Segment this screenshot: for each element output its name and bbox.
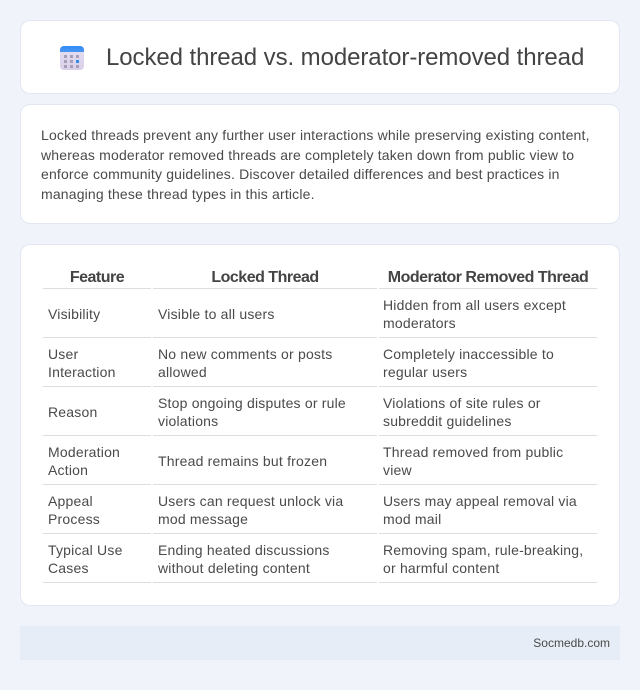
row: reason: Violations of site rules or xyxy=(383,395,541,411)
row: visibility: Visibility xyxy=(48,306,100,322)
table header xyxy=(43,269,597,289)
table header: Feature xyxy=(70,269,124,286)
row: user interaction: No new comments or posts xyxy=(158,346,332,362)
row: user interaction: Interaction xyxy=(48,364,116,380)
row: moderation action: Moderation xyxy=(48,444,120,460)
row: visibility xyxy=(43,297,597,338)
row: user interaction xyxy=(43,346,597,387)
row: appeal process: mod mail xyxy=(383,511,441,527)
row: moderation action: Thread remains but frozen xyxy=(158,453,327,469)
row: reason: Reason xyxy=(48,404,97,420)
row: typical use cases: Ending heated discussions xyxy=(158,542,330,558)
row: user interaction: Completely inaccessible to xyxy=(383,346,554,362)
row: visibility: Visible to all users xyxy=(158,306,275,322)
panel: comparison table xyxy=(20,244,620,606)
panel: intro text xyxy=(20,104,620,224)
row: reason: violations xyxy=(158,413,218,429)
table header: Moderator Removed Thread xyxy=(388,269,588,286)
intro paragraph xyxy=(41,127,590,202)
table header: Locked Thread xyxy=(211,269,319,286)
row: visibility: moderators xyxy=(383,315,456,331)
panel: title card xyxy=(20,20,620,94)
row: typical use cases: without deleting content xyxy=(158,560,310,576)
row: moderation action: Thread removed from public xyxy=(383,444,563,460)
row: user interaction: User xyxy=(48,346,78,362)
row: typical use cases: Cases xyxy=(48,560,89,576)
row: typical use cases: Typical Use xyxy=(48,542,123,558)
row: user interaction: allowed xyxy=(158,364,207,380)
row: appeal process: mod message xyxy=(158,511,248,527)
row: reason: subreddit guidelines xyxy=(383,413,512,429)
intro paragraph: managing these thread types in this article. xyxy=(41,186,315,202)
row: reason: Stop ongoing disputes or rule xyxy=(158,395,346,411)
footer bar xyxy=(20,626,620,660)
row: user interaction: regular users xyxy=(383,364,467,380)
row: reason xyxy=(43,395,597,436)
row: moderation action xyxy=(43,444,597,485)
row: appeal process xyxy=(43,493,597,534)
row: typical use cases xyxy=(43,542,597,583)
row: appeal process: Users may appeal removal via xyxy=(383,493,577,509)
row: moderation action: Action xyxy=(48,462,88,478)
intro paragraph: enforce community guidelines. Discover detailed differences and best practices in xyxy=(41,166,560,182)
intro paragraph: whereas moderator removed threads are completely taken down from public view to xyxy=(41,147,574,163)
row: visibility: Hidden from all users except xyxy=(383,297,566,313)
row: appeal process: Process xyxy=(48,511,100,527)
row: appeal process: Appeal xyxy=(48,493,93,509)
row: typical use cases: Removing spam, rule-breaking, xyxy=(383,542,583,558)
row: typical use cases: or harmful content xyxy=(383,560,499,576)
icon: calendar xyxy=(60,46,84,70)
intro paragraph: Locked threads prevent any further user interactions while preserving existing content, xyxy=(41,127,590,143)
row: appeal process: Users can request unlock via xyxy=(158,493,343,509)
footer source label: Socmedb.com xyxy=(533,636,610,650)
row: moderation action: view xyxy=(383,462,412,478)
title: Locked thread vs. moderator-removed thread xyxy=(106,44,584,71)
